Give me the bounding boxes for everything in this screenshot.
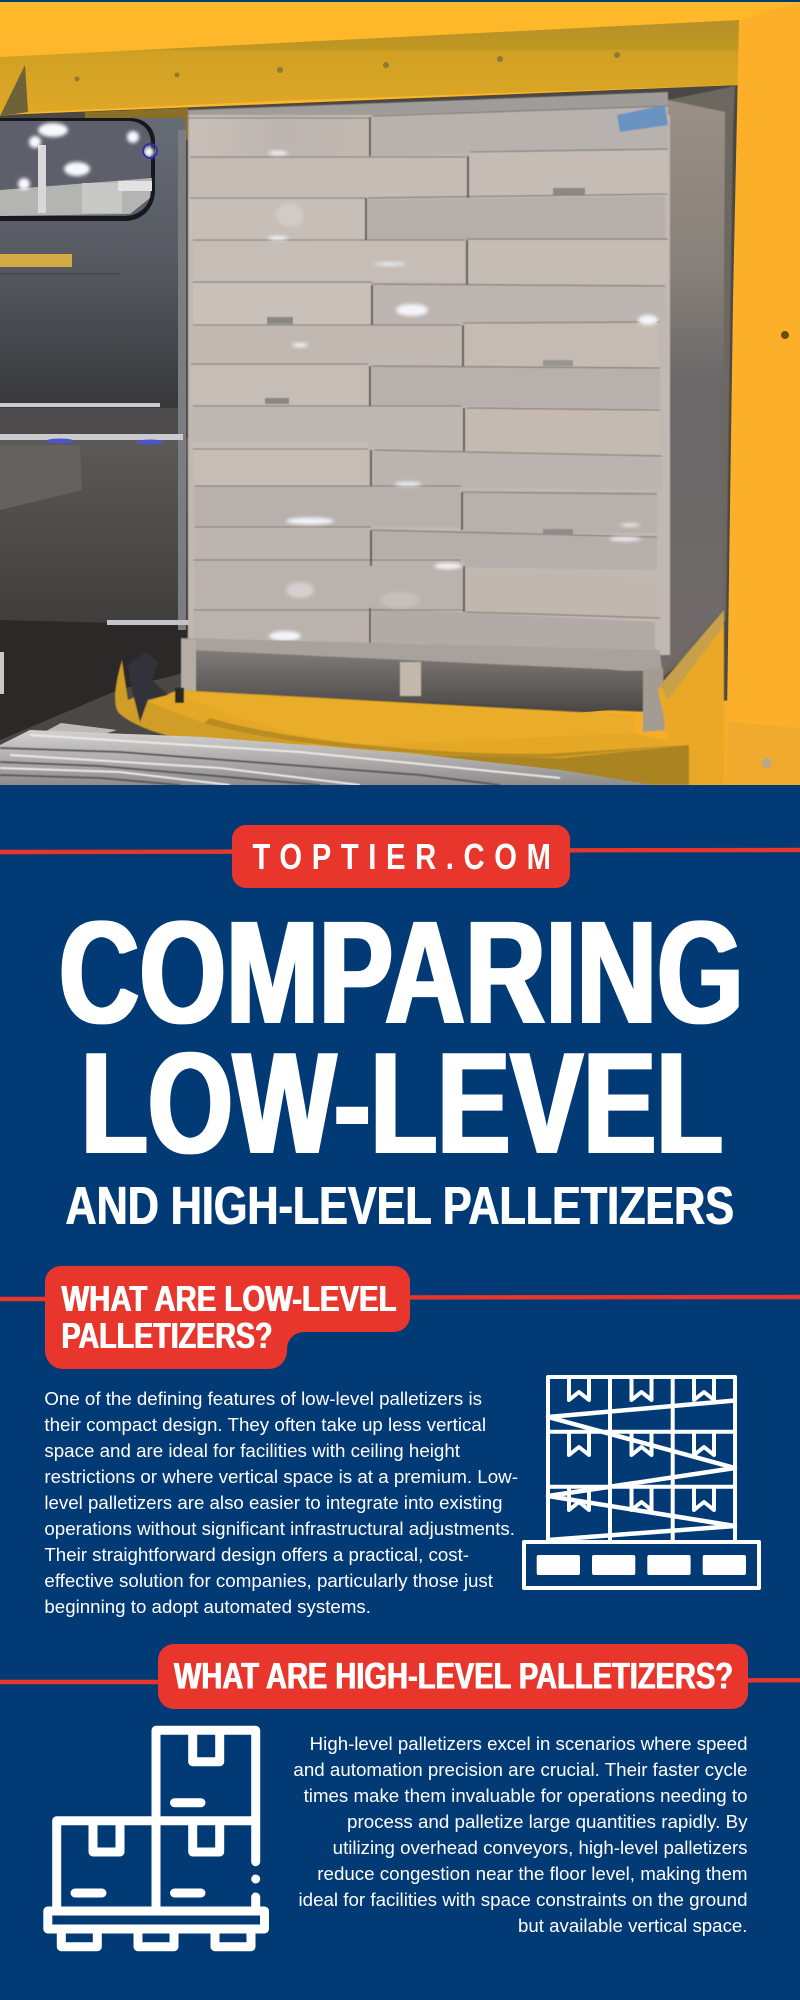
section 2 body text: but available vertical space. <box>518 1915 748 1936</box>
section 1 divider line <box>0 1297 800 1299</box>
pallet under load <box>181 638 665 732</box>
section 1 heading: what are low-level palletizers <box>45 1266 410 1369</box>
section 1 body text: operations without significant infrastructural adjustments. <box>44 1518 515 1539</box>
wrapped carton stack <box>188 86 735 680</box>
conveyor rollers <box>0 723 653 785</box>
section 2 body text: High-level palletizers excel in scenarios where speed <box>310 1733 748 1754</box>
section 2 body text: reduce congestion near the floor level, making them <box>317 1863 748 1884</box>
icon: shrink-wrapped boxes on pallet <box>524 1377 759 1588</box>
section 2 divider line <box>0 1680 800 1682</box>
section 1 body text: beginning to adopt automated systems. <box>44 1596 371 1617</box>
yellow lower frame and ramp <box>115 610 724 785</box>
section 1 body text: Their straightforward design offers a practical, cost- <box>44 1544 469 1565</box>
section 1 body text: their compact design. They often take up less vertical <box>44 1414 486 1435</box>
photo: wrapped pallet load inside yellow palletizer <box>0 2 800 785</box>
section 1 body text: One of the defining features of low-level palletizers is <box>44 1388 482 1409</box>
section 2 body text: utilizing overhead conveyors, high-level palletizers <box>333 1837 748 1858</box>
highlights on stretch wrap <box>268 151 658 671</box>
brand pill: TOPTIER.COM: TOPTIER.COM <box>252 837 551 878</box>
icon: stacked cartons on pallet <box>48 1730 264 1947</box>
section 2 body text: times make them invaluable for operations needing to <box>304 1785 748 1806</box>
section 1 body text: effective solution for companies, particularly those just <box>44 1570 493 1591</box>
section 2 body text <box>293 1733 748 1936</box>
section 1 body text: restrictions or where vertical space is at a premium. Low- <box>44 1466 518 1487</box>
section 2 body text: and automation precision are crucial. Their faster cycle <box>293 1759 748 1780</box>
section 1 heading: what are low-level palletizers: PALLETIZERS? <box>62 1315 272 1356</box>
section 1 body text: level palletizers are also easier to integrate into existing <box>44 1492 503 1513</box>
section 2 body text: ideal for facilities with space constraints on the ground <box>298 1889 748 1910</box>
section 1 body text: space and are ideal for facilities with ceiling height <box>44 1440 460 1461</box>
divider line behind logo pill <box>0 850 800 852</box>
machine window <box>0 118 157 221</box>
section 2 body text: process and palletize large quantities rapidly. By <box>347 1811 748 1832</box>
section 1 body text <box>44 1388 518 1617</box>
section 2 heading: what are high-level palletizers <box>158 1644 748 1709</box>
section 1 heading: what are low-level palletizers: WHAT ARE LOW-LEVEL <box>62 1278 396 1319</box>
title <box>59 891 744 1236</box>
grey machine panels <box>0 118 190 740</box>
brand pill: TOPTIER.COM <box>232 825 570 888</box>
